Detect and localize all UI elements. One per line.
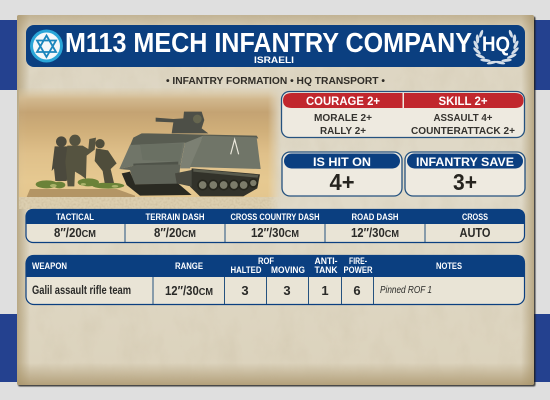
movement values: 12″/30CM — [351, 225, 399, 240]
road wheels — [198, 179, 257, 190]
rally value: RALLY 2+ — [320, 126, 366, 137]
weapons headers: MOVING — [271, 265, 305, 275]
skill label: SKILL 2+ — [438, 96, 488, 108]
weapons headers: WEAPON — [32, 261, 67, 271]
courage label: COURAGE 2+ — [306, 96, 380, 108]
shadow under hull — [122, 172, 192, 196]
table: weapons — [26, 255, 525, 304]
corner and side plate — [180, 136, 203, 168]
weapons headers: NOTES — [436, 261, 462, 271]
weapons row: Galil assault rifle team: 3 — [241, 283, 249, 298]
side marking — [231, 139, 239, 154]
icon: star of David roundel — [30, 30, 63, 62]
HQ text: HQ — [482, 33, 510, 56]
weapons headers: HALTED — [230, 265, 262, 275]
base: ground and foliage — [27, 178, 135, 197]
skill header — [404, 93, 524, 108]
morale value: MORALE 2+ — [314, 113, 372, 124]
panel: courage and skill — [282, 92, 524, 138]
weapons row: Galil assault rifle team — [32, 283, 432, 298]
weapons row: Galil assault rifle team: 12″/30CM — [165, 283, 213, 298]
movement values — [54, 225, 490, 240]
title text: M113 MECH INFANTRY COMPANY — [65, 27, 472, 58]
weapons headers: FIRE- — [349, 256, 367, 266]
table: movement — [26, 209, 525, 242]
weapons headers: ROF — [258, 256, 274, 266]
is hit on value: 4+ — [330, 169, 354, 195]
lower front — [119, 164, 181, 184]
weapons row: Galil assault rifle team: 6 — [353, 283, 361, 298]
front glacis — [119, 142, 185, 169]
weapons row: Galil assault rifle team: Galil assault rifle team — [32, 285, 131, 297]
infantry save label: INFANTRY SAVE — [416, 157, 514, 169]
assault value: ASSAULT 4+ — [434, 113, 493, 124]
weapons headers — [32, 256, 462, 275]
infantry save value: 3+ — [453, 169, 477, 195]
weapons headers: RANGE — [175, 261, 203, 271]
hull top deck — [130, 133, 258, 146]
soldiers — [52, 135, 117, 186]
title banner — [26, 25, 525, 67]
movement headers: TERRAIN DASH — [146, 212, 204, 222]
formation line: • INFANTRY FORMATION • HQ TRANSPORT • — [166, 76, 386, 87]
is hit on label: IS HIT ON — [313, 157, 371, 169]
panel: is hit on — [282, 152, 402, 196]
M113 vehicle — [119, 112, 261, 196]
weapons row: Galil assault rifle team: Pinned ROF 1 — [380, 285, 432, 296]
weapons row: Galil assault rifle team: 3 — [283, 283, 291, 298]
movement values: 8″/20CM — [54, 225, 96, 240]
photo: M113 and infantry miniatures — [19, 88, 281, 209]
movement values: AUTO — [460, 225, 490, 240]
weapons row: Galil assault rifle team: 1 — [321, 283, 329, 298]
weapons headers: ANTI- — [314, 256, 338, 266]
counterattack value: COUNTERATTACK 2+ — [411, 126, 515, 137]
panel: infantry save — [405, 152, 525, 196]
turret and gun — [156, 112, 208, 133]
movement headers — [56, 212, 488, 222]
icon: HQ laurel badge — [472, 29, 520, 67]
subtitle: Israeli: ISRAELI — [254, 55, 294, 66]
courage header — [283, 93, 402, 108]
movement headers: CROSS COUNTRY DASH — [230, 212, 320, 222]
movement values: 8″/20CM — [154, 225, 196, 240]
weapons headers: POWER — [344, 265, 373, 275]
movement headers: CROSS — [462, 212, 488, 222]
weapons headers: TANK — [314, 265, 338, 275]
movement headers: TACTICAL — [56, 212, 94, 222]
tracks — [190, 168, 260, 196]
movement values: 12″/30CM — [251, 225, 299, 240]
movement headers: ROAD DASH — [352, 212, 398, 222]
